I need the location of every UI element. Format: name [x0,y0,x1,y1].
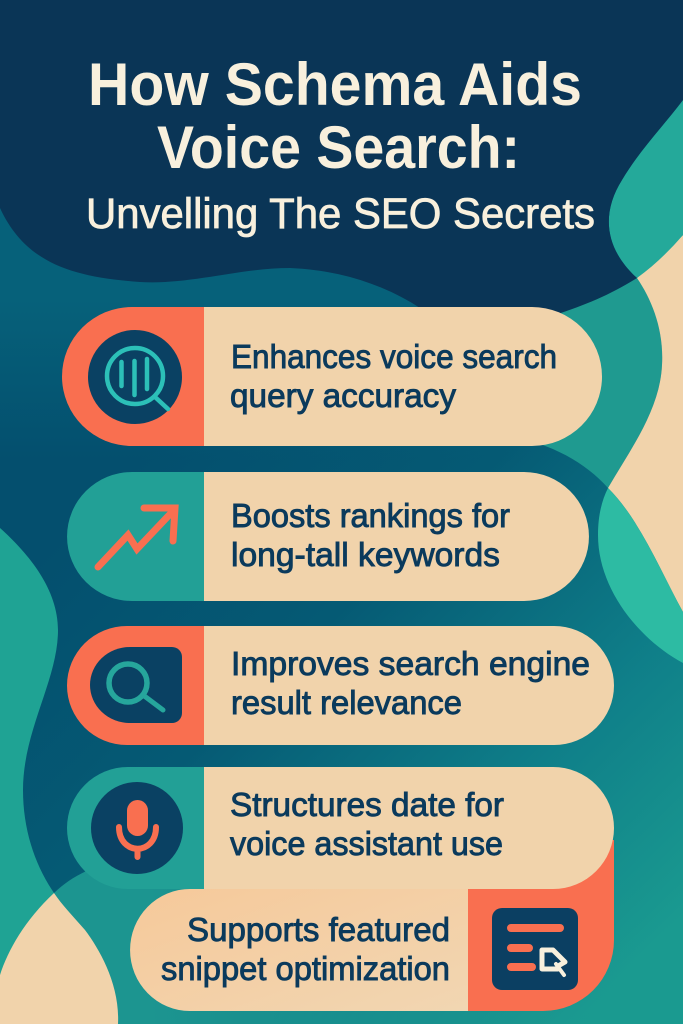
text: voice assistant: voice assistant use [230,825,503,862]
text: voice assistant: Structures date for [230,786,504,823]
title [86,51,595,238]
text: rankings: long-tall keywords [231,536,500,573]
icon: search box [90,647,182,723]
text: featured snippet [161,911,450,987]
background shape: bottom-left cream [0,893,118,1024]
text: query accuracy [230,338,557,414]
background shape: bright teal blob [598,488,683,663]
text: featured snippet: snippet optimization [161,950,450,987]
panel: featured snippet [130,840,614,1011]
panel: query accuracy [62,307,602,446]
icon: microphone [91,782,183,874]
text: relevance: result relevance [231,684,462,721]
icon: snippet with cursor [492,908,578,990]
icon: magnifier with bars [88,330,182,424]
text: relevance: Improves search engine [231,645,590,682]
text: rankings: Boosts rankings for [231,497,510,534]
panel: voice assistant [67,767,614,889]
background shape: top navy blob [0,0,683,315]
background shape: right teal wave [490,270,662,488]
background shape: bottom teal [54,860,640,1024]
panel: rankings [67,472,589,601]
text: featured snippet: Supports featured [187,911,450,948]
panel: relevance [67,626,614,745]
text: query accuracy: query accuracy [230,377,457,414]
background shape: left teal blob [0,528,58,975]
title: Voice Search: [157,114,520,181]
text: voice assistant [230,786,504,862]
title: How Schema Aids [88,51,582,118]
background shape: top-right teal blob [609,100,683,278]
background shape: right cream area [608,235,683,612]
subtitle: Unvelling The SEO Secrets [86,190,595,238]
icon: rising arrow [98,508,175,567]
text: query accuracy: Enhances voice search [231,338,557,375]
text: rankings [231,497,510,573]
text: relevance [231,645,590,721]
